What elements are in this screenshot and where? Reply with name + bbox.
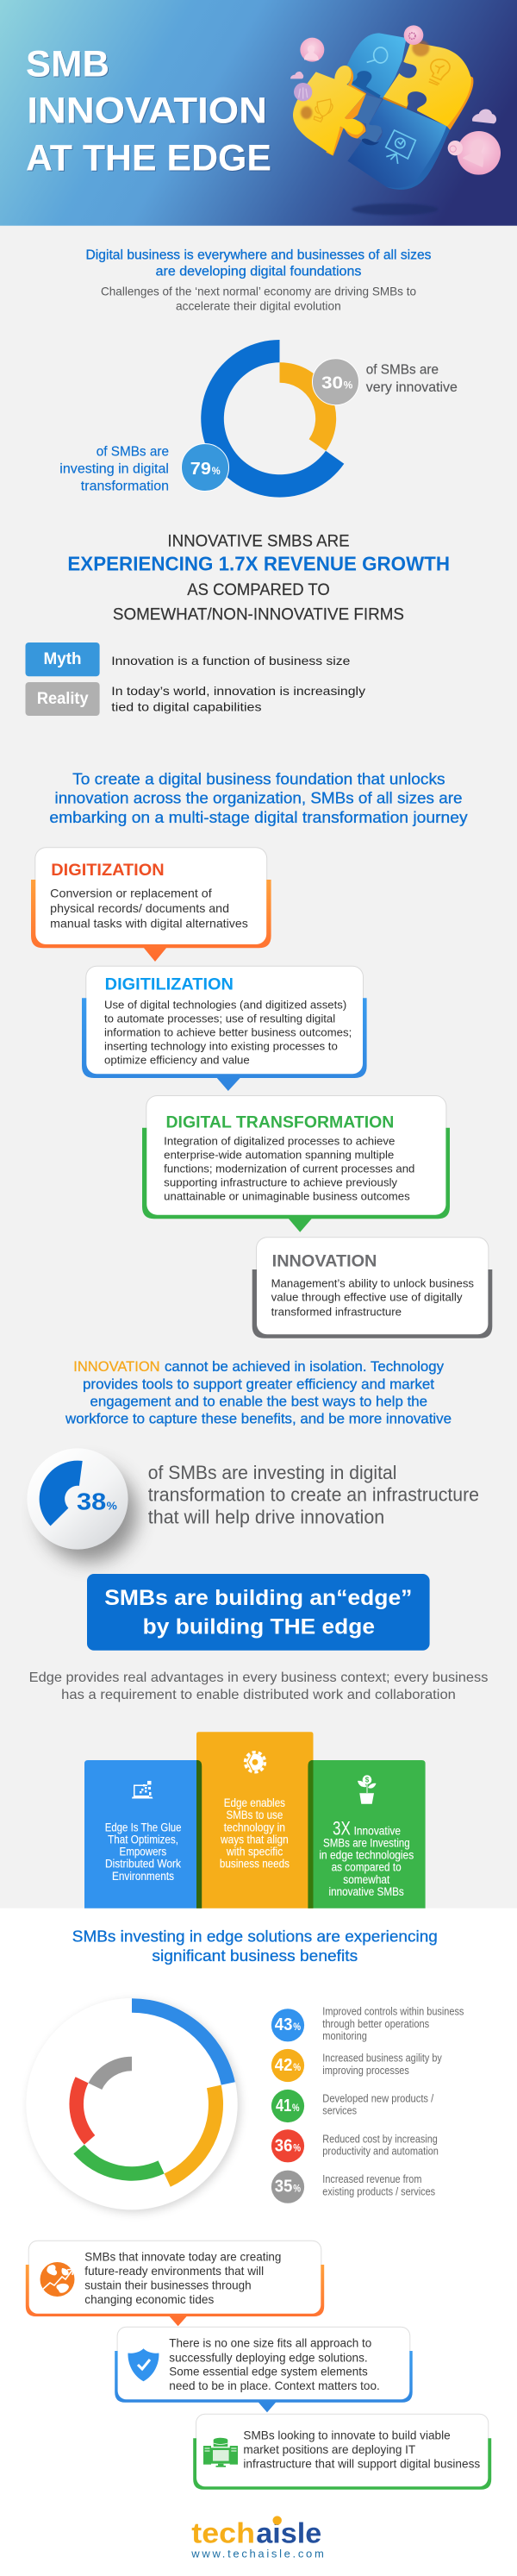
icon: trophy: [314, 99, 333, 122]
legend: 36%: %: [293, 2142, 301, 2154]
text: glue: Edge Is The Glue: [105, 1821, 181, 1833]
headline: revenue growth: INNOVATIVE SMBS ARE: [167, 531, 350, 550]
legend: 43%: through better operations: [322, 2018, 429, 2030]
text: edge enables: technology in: [224, 1821, 285, 1833]
edge description text: [29, 1670, 488, 1702]
text: glue: That Optimizes,: [108, 1833, 178, 1846]
journey intro text: To create a digital business foundation that unlocks: [72, 770, 445, 787]
column: green: [308, 1760, 426, 1908]
panel: innovation: value through effective use of digitally: [271, 1291, 463, 1304]
panel: digital transformation: enterprise-wide automation spanning multiple: [164, 1148, 394, 1161]
text: 3X innovative: SMBs are Investing: [323, 1836, 410, 1849]
text: edge enables: with specific: [226, 1846, 283, 1858]
legend: 42%: Increased business agility by: [322, 2053, 442, 2065]
intro text block: Challenges of the ‘next normal’ economy are driving SMBs to: [101, 285, 416, 298]
legend: 43%: 43: [275, 2015, 292, 2034]
text: edge enables: ways that align: [220, 1833, 289, 1846]
lower white background: [0, 1908, 517, 2576]
text: 3X innovative: as compared to: [332, 1861, 402, 1874]
panel: digital transformation: functions; modernization of current processes and: [164, 1162, 414, 1175]
headline: revenue growth: SOMEWHAT/NON-INNOVATIVE FIRMS: [113, 605, 404, 624]
innovation paragraph: INNOVATION: [73, 1359, 160, 1375]
panel: digitization: manual tasks with digital alternatives: [50, 916, 248, 930]
label: 79%: investing in digital: [59, 462, 169, 477]
panel: digitization: DIGITIZATION: [51, 862, 165, 880]
legend: 41%: services: [322, 2105, 357, 2117]
donut chart: 79% and 30%: [59, 340, 458, 498]
panel: digitilization: [82, 966, 367, 1091]
panel: digitilization: inserting technology into existing processes to: [104, 1039, 338, 1052]
legend: 35%: [271, 2171, 435, 2203]
logo: techaisle: www.techaisle.com: [190, 2548, 324, 2560]
stat text: 38%: [148, 1462, 479, 1528]
icon: money plant: [358, 1775, 376, 1804]
panel: digital transformation: supporting infrastructure to achieve previously: [164, 1175, 398, 1188]
reality row: In today’s world, innovation is increasingly: [111, 684, 365, 698]
badge: 79%: %: [212, 465, 221, 477]
icon: globe: [40, 2262, 74, 2297]
icon: light bulb: [429, 60, 450, 85]
label: 79%: transformation: [81, 479, 169, 494]
benefits heading: SMBs investing in edge solutions are experiencing: [72, 1927, 438, 1946]
stat text: 38%: of SMBs are investing in digital: [148, 1462, 396, 1483]
badge: 30%: 30: [321, 374, 343, 393]
callout: IT infrastructure: [193, 2414, 491, 2490]
legend: 35%: %: [293, 2182, 301, 2194]
stat: 38% disc: [27, 1448, 137, 1562]
callout: IT infrastructure: market positions are deploying IT: [243, 2442, 416, 2456]
title: [26, 43, 271, 179]
reality row: tied to digital capabilities: [111, 700, 262, 714]
icon: gear: [245, 1752, 265, 1772]
legend: 35%: 35: [275, 2177, 292, 2196]
benefits heading: [72, 1927, 438, 1965]
edge description text: Edge provides real advantages in every business context; every business: [29, 1670, 488, 1685]
reality row: Reality: [37, 690, 89, 708]
text: 3X innovative: somewhat: [343, 1873, 390, 1886]
stat: 38% disc: %: [107, 1500, 117, 1513]
label: 30%: very innovative: [366, 380, 458, 395]
intro text block: are developing digital foundations: [156, 264, 361, 279]
panel: digitization: Conversion or replacement of: [50, 887, 212, 900]
legend: 41%: [271, 2090, 434, 2122]
column: yellow: [196, 1732, 314, 1908]
illustration: puzzle pieces: [290, 25, 501, 215]
legend: 35%: Increased revenue from: [322, 2173, 421, 2185]
panel: digitilization: optimize efficiency and value: [104, 1053, 250, 1066]
text: 3X innovative: 3X: [333, 1817, 351, 1839]
text: glue: [105, 1821, 181, 1883]
panel: digital transformation: Integration of digitalized processes to achieve: [164, 1134, 395, 1147]
column: glue (blue): [84, 1760, 202, 1908]
callout: future-ready: future-ready environments that will: [84, 2264, 264, 2278]
text: 3X innovative: innovative SMBs: [329, 1885, 404, 1898]
stat: 38% disc: 38: [77, 1489, 106, 1515]
column: green: $: [365, 1777, 370, 1783]
callout: no one size fits all: [115, 2327, 413, 2412]
callout: future-ready: [26, 2241, 324, 2326]
legend: 43%: %: [293, 2021, 301, 2033]
banner: building the edge: by building THE edge: [143, 1614, 375, 1639]
legend: 36%: [271, 2129, 439, 2162]
journey intro text: innovation across the organization, SMBs of all sizes are: [55, 790, 462, 807]
legend: 36%: 36: [275, 2137, 292, 2156]
panel: digitilization: information to achieve better business outcomes;: [104, 1025, 352, 1038]
text: glue: Distributed Work: [105, 1858, 181, 1871]
logo: techaisle: [190, 2516, 324, 2560]
badge: 79%: 79: [190, 460, 211, 479]
callout: future-ready: changing economic tides: [84, 2292, 214, 2306]
banner: building the edge: [87, 1574, 430, 1651]
callout: no one size fits all: successfully deploying edge solutions.: [169, 2350, 368, 2364]
myth row: Innovation is a function of business size: [111, 654, 351, 668]
icon: presentation board: [386, 130, 415, 164]
label: 30%: of SMBs are: [366, 362, 439, 377]
panel: digital transformation: [142, 1095, 450, 1232]
myth row: Myth: [43, 650, 81, 668]
journey intro text: embarking on a multi-stage digital transformation journey: [49, 809, 468, 826]
text: glue: Environments: [112, 1870, 174, 1883]
callout: no one size fits all: need to be in place. Context matters too.: [169, 2379, 380, 2392]
title: AT THE EDGE: [26, 137, 271, 179]
callout: no one size fits all: There is no one size fits all approach to: [169, 2336, 372, 2350]
intro text block: accelerate their digital evolution: [176, 298, 341, 312]
journey intro text: [49, 770, 468, 826]
badge: 30%: [312, 359, 358, 405]
panel: innovation: INNOVATION: [272, 1252, 377, 1270]
text: 3X innovative: in edge technologies: [319, 1849, 414, 1862]
logo: techaisle: aisle: [256, 2516, 321, 2548]
icon: magnifier: [367, 47, 388, 63]
callout: future-ready: sustain their businesses through: [84, 2278, 252, 2292]
edge description text: has a requirement to enable distributed work and collaboration: [61, 1688, 456, 1702]
panel: innovation: [252, 1237, 492, 1338]
text: edge enables: SMBs to use: [226, 1808, 283, 1821]
label: 79%: [59, 444, 169, 494]
panel: digitilization: to automate processes; use of resulting digital: [104, 1012, 335, 1025]
stat text: 38%: transformation to create an infrastructure: [148, 1484, 479, 1506]
stat text: 38%: that will help drive innovation: [148, 1507, 384, 1528]
panel: digitization: physical records/ documents and: [50, 901, 229, 915]
legend: 35%: existing products / services: [322, 2185, 435, 2197]
legend: 43%: monitoring: [322, 2030, 367, 2042]
panel: digital transformation: DIGITAL TRANSFORMATION: [165, 1114, 394, 1132]
text: glue: Empowers: [119, 1846, 166, 1858]
myth row: [26, 642, 351, 676]
icon: shield: [128, 2348, 159, 2381]
icon: servers: [203, 2438, 238, 2467]
logo: techaisle: tech: [191, 2516, 255, 2548]
panel: digitization: [31, 847, 271, 962]
text: edge enables: business needs: [220, 1858, 290, 1871]
title: INNOVATION: [27, 91, 267, 132]
legend: 43%: [271, 2006, 464, 2042]
legend: 42%: improving processes: [322, 2065, 409, 2077]
radial bar chart: [26, 1998, 238, 2209]
panel: innovation: Management’s ability to unlock business: [271, 1277, 474, 1290]
page background: [0, 0, 517, 1908]
callout: no one size fits all: Some essential edge system elements: [169, 2365, 368, 2379]
innovation paragraph: [65, 1359, 452, 1426]
reality row: [26, 682, 365, 716]
legend: 36%: Reduced cost by increasing: [322, 2133, 438, 2145]
text: edge enables: Edge enables: [224, 1796, 285, 1809]
headline: revenue growth: AS COMPARED TO: [187, 580, 330, 599]
intro text block: [86, 248, 431, 312]
panel: digitilization: Use of digital technologies (and digitized assets): [104, 998, 346, 1011]
panel: digital transformation: unattainable or unimaginable business outcomes: [164, 1189, 410, 1202]
innovation paragraph: engagement and to enable the best ways to help the: [90, 1394, 427, 1409]
innovation paragraph: cannot be achieved in isolation. Technology: [165, 1359, 445, 1375]
intro text block: Digital business is everywhere and businesses of all sizes: [86, 248, 431, 263]
badge: 30%: %: [344, 379, 353, 392]
icon: laptop: [132, 1781, 153, 1799]
innovation paragraph: workforce to capture these benefits, and be more innovative: [65, 1411, 452, 1426]
text: edge enables: [220, 1796, 290, 1871]
panel: digitilization: DIGITILIZATION: [105, 976, 234, 994]
text: 3X innovative: Innovative: [354, 1824, 401, 1837]
legend: 41%: %: [292, 2102, 300, 2114]
text: 3X innovative: [319, 1817, 414, 1898]
callout: IT infrastructure: infrastructure that will support digital business: [243, 2457, 480, 2471]
label: 30%: [366, 362, 458, 395]
innovation paragraph: provides tools to support greater efficiency and market: [83, 1376, 434, 1392]
legend: 41%: 41: [276, 2097, 291, 2115]
legend: 42%: [271, 2049, 442, 2082]
headline: revenue growth: [67, 531, 450, 624]
legend: 43%: Improved controls within business: [322, 2006, 464, 2018]
banner: building the edge: SMBs are building an“edge”: [104, 1586, 412, 1610]
legend: 36%: productivity and automation: [322, 2145, 439, 2157]
label: 79%: of SMBs are: [97, 444, 169, 459]
bubbles: [290, 25, 501, 175]
legend: 41%: Developed new products /: [322, 2093, 434, 2105]
header banner: [0, 0, 517, 226]
legend: 42%: 42: [275, 2056, 292, 2075]
title: SMB: [26, 43, 109, 85]
benefits heading: significant business benefits: [152, 1946, 358, 1965]
legend: 42%: %: [293, 2061, 301, 2073]
panel: innovation: transformed infrastructure: [271, 1306, 402, 1318]
callout: IT infrastructure: SMBs looking to innovate to build viable: [243, 2429, 451, 2442]
headline: revenue growth: EXPERIENCING 1.7X REVENUE GROWTH: [67, 553, 450, 575]
callout: future-ready: SMBs that innovate today are creating: [84, 2250, 281, 2264]
badge: 79%: [181, 443, 229, 492]
